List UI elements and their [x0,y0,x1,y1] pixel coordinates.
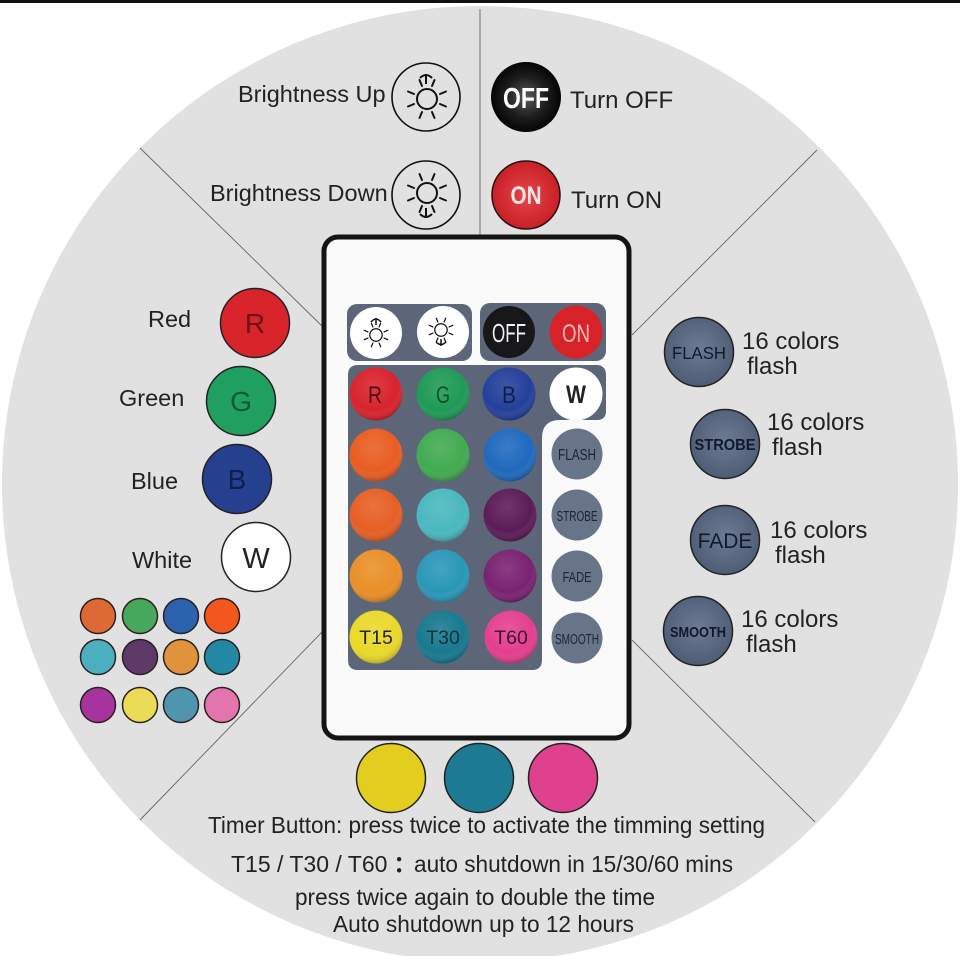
icon: off button: OFF [503,83,549,115]
remote control [324,237,629,738]
panel: colour keys: W [566,381,586,409]
button: G [206,366,276,436]
icon: on button [492,161,560,229]
button: W [222,522,290,592]
icon: brightness up [392,63,460,131]
label: Brightness Down: Brightness Down [210,180,388,206]
sector dividers [140,9,817,822]
panel: colour keys: B [502,382,516,409]
panel: mode keys: STROBE [556,508,598,525]
panel: RGBW colours [80,288,290,722]
label: Blue: Blue [131,468,178,494]
text: FADE description: 16 colors [770,517,867,544]
button: G: G [230,386,252,417]
timer swatch: pink [528,744,598,812]
button: SMOOTH [664,596,732,666]
label: Turn ON: Turn ON [571,187,662,214]
button: STROBE [690,410,760,478]
button: FADE [690,506,760,574]
timer instructions [208,812,765,937]
panel: power keys: OFF [492,318,526,348]
timer instructions: Timer Button: press twice to activate the timming setting [208,812,765,838]
panel: mode keys: SMOOTH [555,631,599,648]
timer instructions: Auto shutdown up to 12 hours [333,911,634,937]
text: STROBE description: 16 colors [767,409,864,436]
timer instructions: auto shutdown in 15/30/60 mins [414,851,733,877]
icon: on button: ON [510,182,542,210]
panel: timer [208,744,765,937]
button: FADE: FADE [698,530,752,553]
text: FADE description: flash [775,542,826,569]
label: Red: Red [148,306,191,332]
text: FLASH description: flash [747,353,798,380]
panel: brightness keys [347,304,472,361]
panel: mode keys: FADE [562,569,592,586]
panel: colour keys: G [436,382,450,409]
text: SMOOTH description: 16 colors [741,606,838,633]
timer instructions: T15 / T30 / T60 ： [231,851,416,877]
panel: mode keys [552,428,602,664]
timer swatch: yellow [356,744,426,812]
button: R [220,288,290,358]
text: SMOOTH description: flash [746,631,797,658]
icon: brightness down [392,161,460,229]
icon: off button [491,62,561,132]
button: STROBE: STROBE [694,437,756,454]
panel: power keys [480,303,606,361]
text: FLASH description: 16 colors [742,328,839,355]
button: FLASH: FLASH [672,343,726,363]
button: W: W [242,543,270,575]
label: Brightness Up: Brightness Up [238,81,386,107]
label: Turn OFF: Turn OFF [570,87,673,114]
panel: brightness and power [210,62,673,229]
button: FLASH [664,318,734,386]
button: R: R [245,308,265,339]
panel: mode keys: FLASH [558,447,596,464]
panel: colour keys: T15 [359,627,393,649]
panel: colour keys [348,365,606,670]
panel: colour keys: T60 [494,627,528,649]
panel: flash modes [664,318,867,666]
timer instructions: press twice again to double the time [295,884,655,910]
remote body [324,237,629,738]
button: SMOOTH: SMOOTH [670,624,726,641]
button: B [202,444,272,514]
label: Green: Green [119,385,184,411]
text: STROBE description: flash [772,434,823,461]
panel: power keys: ON [562,320,590,348]
timer swatch: teal [444,744,514,812]
panel: colour keys: T30 [426,627,460,649]
button: B: B [228,464,246,495]
label: White: White [132,547,192,573]
colour swatch grid [80,598,240,722]
panel: colour keys: R [368,382,382,409]
